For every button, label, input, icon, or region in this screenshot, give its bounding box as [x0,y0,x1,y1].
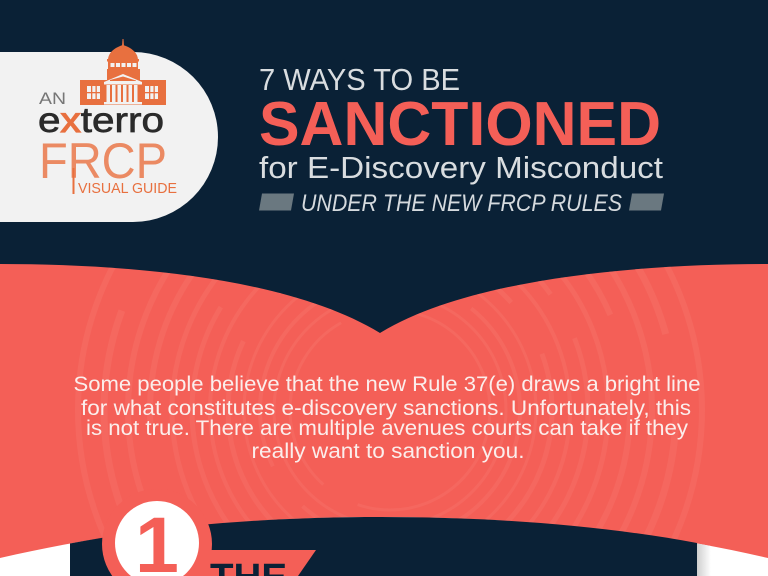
logo text: visual guide: VISUAL GUIDE [78,180,177,197]
title line 3: for E-Discovery Misconduct [259,150,663,185]
icon: capitol building [80,39,166,105]
intro text: is not true. There are multiple avenues courts can take if they [86,416,688,440]
intro text [74,372,700,463]
coral panel [0,264,768,558]
concentric rings pattern [77,266,704,382]
intro text: for what constitutes e-discovery sanctions. Unfortunately, this [81,396,691,420]
logo text: FRCP: FRCP [39,133,167,189]
title line 2: SANCTIONED [259,90,661,159]
logo panel [0,39,218,222]
section title banner [200,550,316,576]
intro text: really want to sanction you. [252,439,524,463]
logo text: exterro: exterro [38,101,164,140]
number badge [102,489,212,576]
subtitle with bars: UNDER THE NEW FRCP RULES [301,190,622,217]
intro text: Some people believe that the new Rule 37(e) draws a bright line [74,372,700,396]
section 1 panel [70,489,711,576]
title line 1: 7 WAYS TO BE [259,62,460,97]
logo text: AN: AN [39,89,66,108]
title [259,62,664,217]
white lower area [0,517,768,576]
